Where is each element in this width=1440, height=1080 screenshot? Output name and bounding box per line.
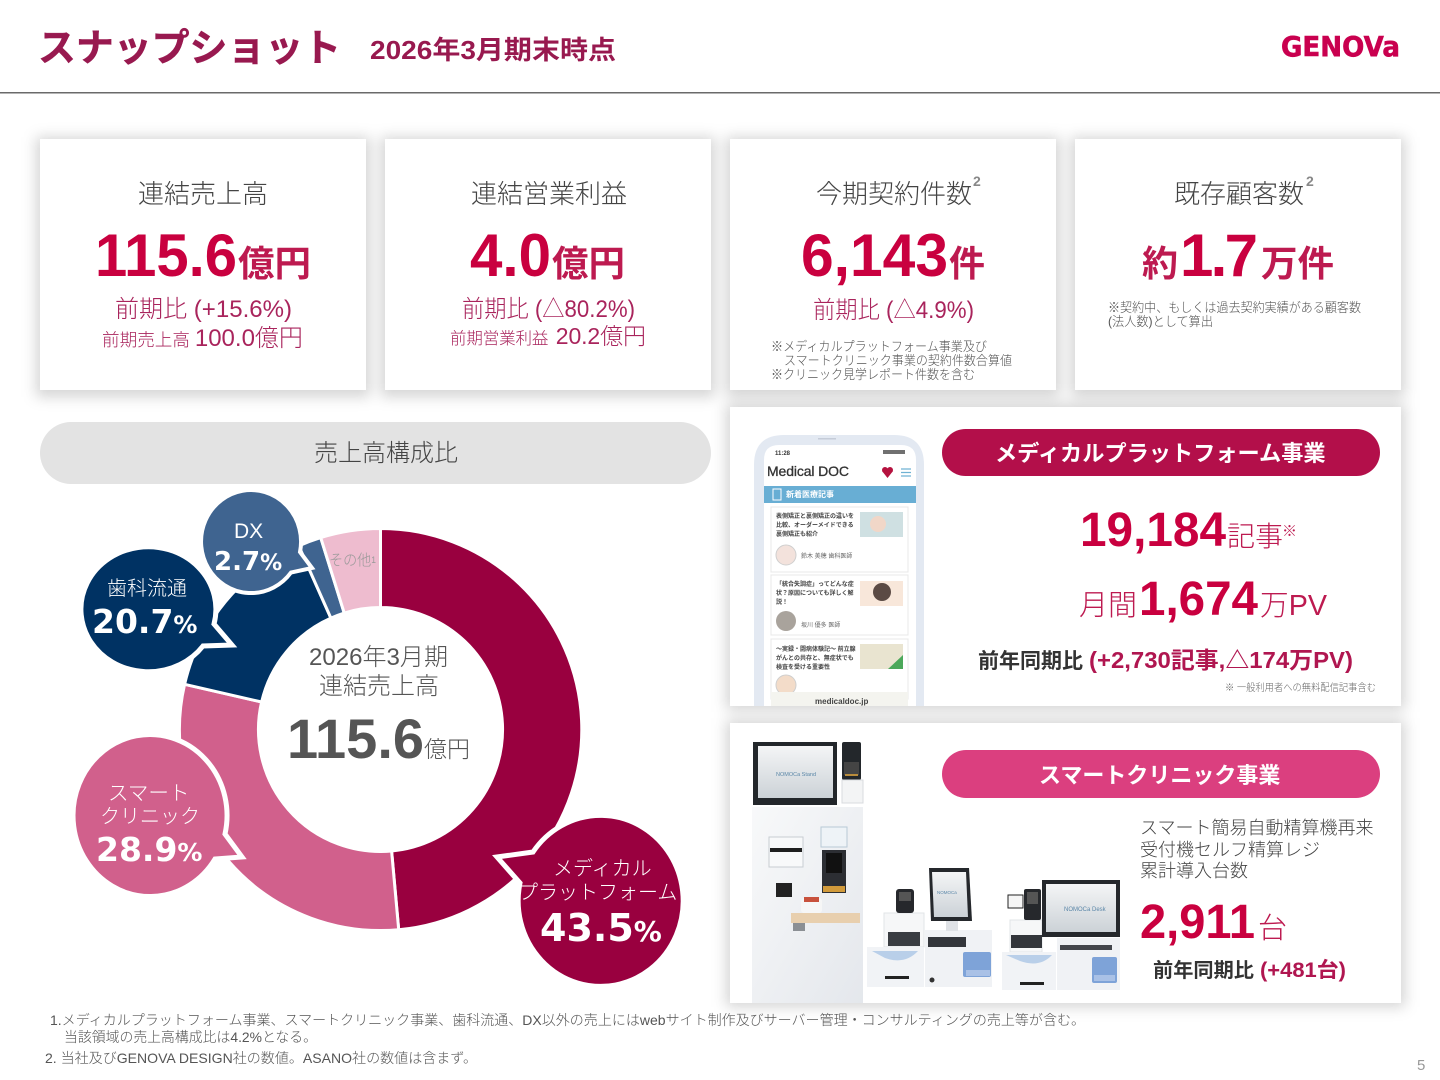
panel: card shadows <box>36 137 1405 1007</box>
heading: customers: 既存顧客数 <box>1174 179 1304 209</box>
title: スナップショット <box>38 28 341 70</box>
image: phone mockup: 11:28 <box>775 451 791 457</box>
callout: smart clinic: スマート <box>108 782 189 805</box>
figure: customers <box>1142 222 1334 289</box>
prior revenue: 前期売上高 100.0億円 <box>102 325 303 352</box>
figure: page views: 万PV <box>1260 590 1328 622</box>
heading: revenue composition: 売上高構成比 <box>314 440 458 467</box>
note: contracts: ※クリニック見学レポート件数を含む <box>771 367 975 382</box>
callout: DX: 2.7% <box>214 547 282 577</box>
prior profit: 前期営業利益 20.2億円 <box>450 323 646 349</box>
figure: customers: 万件 <box>1261 243 1334 284</box>
description: smart clinic: スマート簡易自動精算機再来 <box>1140 818 1373 838</box>
figure: profit <box>470 222 625 289</box>
figure: articles: 記事 <box>1227 521 1283 552</box>
note: customers: ※契約中、もしくは過去契約実績がある顧客数 <box>1108 300 1361 315</box>
figure: customers: 1.7 <box>1180 222 1258 289</box>
donut center label: 億円 <box>424 736 470 762</box>
footnotes: 2. 当社及びGENOVA DESIGN社の数値。ASANO社の数値は含まず。 <box>45 1050 477 1066</box>
panel: smart clinic business <box>730 723 1401 1003</box>
callout: medical platform: プラットフォーム <box>518 882 677 904</box>
figure: customers: 約 <box>1142 243 1178 284</box>
image: phone mockup: 「統合失調症」ってどんな症 <box>776 580 854 588</box>
figure: revenue <box>95 222 311 289</box>
figure: articles: ※ <box>1282 523 1297 540</box>
callout: dental: 20.7% <box>92 602 197 641</box>
donut center label: 2026年3月期 <box>309 644 448 671</box>
image: phone mockup: Medical DOC <box>767 463 849 479</box>
figure: page views <box>1079 573 1328 626</box>
figure: revenue: 億円 <box>238 243 311 284</box>
note: customers: (法人数)として算出 <box>1108 314 1213 329</box>
description: smart clinic <box>1140 818 1373 881</box>
panel: existing customers <box>1075 139 1401 390</box>
callout: dental: 歯科流通 <box>107 577 187 600</box>
note: contracts: スマートクリニック事業の契約件数合算値 <box>784 353 1012 368</box>
figure: installations: 2,911 <box>1140 896 1255 949</box>
callout: medical platform: メディカル <box>553 857 652 880</box>
note: contracts: ※メディカルプラットフォーム事業及び <box>771 339 987 354</box>
image: phone mockup: 検査を受ける重要性 <box>776 663 830 671</box>
pill heading: smart clinic <box>942 750 1380 798</box>
comparison: installations: (+481台) <box>1260 959 1346 982</box>
donut center label <box>287 644 470 770</box>
image: phone mockup: がんとの共存と、無症状でも <box>776 654 854 662</box>
heading: profit: 連結営業利益 <box>471 179 627 209</box>
footnote mark: 2 <box>1306 173 1314 189</box>
callout: medical platform <box>497 815 683 986</box>
comparison: articles and views <box>978 647 1353 673</box>
panel: consolidated revenue <box>40 139 366 390</box>
image: phone mockup: 説！ <box>776 598 788 606</box>
note: articles: ※ 一般利用者への無料配信記事含む <box>1225 682 1376 694</box>
callout: DX <box>201 490 312 593</box>
pill heading: medical platform: メディカルプラットフォーム事業 <box>995 440 1326 466</box>
image: kiosk and desktop terminals <box>752 742 1120 1003</box>
footnotes: 1.メディカルプラットフォーム事業、スマートクリニック事業、歯科流通、DX以外の売上にはwebサイト制作及びサーバー管理・コンサルティングの売上等が含む。 <box>50 1012 1085 1028</box>
figure: installations: 台 <box>1258 912 1287 945</box>
image: phone mockup: 新着医療記事 <box>786 489 834 499</box>
note: contracts <box>771 339 1012 382</box>
image: stand kiosk: NOMOCa Stand <box>776 772 816 778</box>
donut center label: 連結売上高 <box>319 673 439 700</box>
image: phone mockup: 坂川 優多 医師 <box>801 621 840 629</box>
panel: operating profit <box>385 139 711 390</box>
callout: smart clinic: クリニック <box>100 806 200 828</box>
subtitle: period: 2026年3月期末時点 <box>370 35 616 65</box>
comparison: contracts: 前期比 (△4.9%) <box>813 297 974 324</box>
panel: medical platform business <box>730 407 1401 706</box>
figure: revenue: 115.6 <box>95 222 237 289</box>
image: phone mockup: medicaldoc.jp <box>815 697 868 706</box>
figure: profit: 億円 <box>552 243 625 284</box>
footnotes: 当該領域の売上高構成比は4.2%となる。 <box>64 1029 317 1045</box>
heading: revenue: 連結売上高 <box>138 179 268 209</box>
pill heading: medical platform <box>942 429 1380 476</box>
label: others: 1 <box>371 555 376 565</box>
pill heading: smart clinic: スマートクリニック事業 <box>1039 763 1280 788</box>
image: self register terminal: NOMOCa <box>937 890 957 895</box>
comparison: installations <box>1153 959 1346 982</box>
figure: articles: 19,184 <box>1080 504 1226 557</box>
image: self register terminal <box>867 868 992 987</box>
figure: articles <box>1080 504 1297 557</box>
figure: contracts: 件 <box>949 243 985 284</box>
figure: page views: 1,674 <box>1139 573 1258 626</box>
donut center label: 115.6 <box>287 707 424 770</box>
comparison: revenue: 前期比 (+15.6%) <box>115 296 292 323</box>
logo: GENOVA: GENOVa <box>1281 30 1400 63</box>
figure: page views: 月間 <box>1079 590 1137 622</box>
callout: dental <box>81 547 232 672</box>
callout: smart clinic <box>73 735 242 897</box>
comparison: installations: 前年同期比 <box>1153 959 1254 982</box>
image: phone mockup: 状？原因についても詳しく解 <box>776 589 854 597</box>
label: others: その他 <box>329 552 374 569</box>
footnotes <box>45 1012 1085 1066</box>
comparison: profit: 前期比 (△80.2%) <box>462 296 635 323</box>
image: desk terminal <box>1002 880 1120 990</box>
image: desk terminal: NOMOCa Desk <box>1064 907 1107 913</box>
image: phone mockup: 比較、オーダーメイドできる <box>776 521 854 529</box>
image: phone mockup: 裏側矯正も紹介 <box>776 530 818 538</box>
image: stand kiosk <box>752 742 863 1003</box>
image: phone mockup: 表側矯正と裏側矯正の違いを <box>776 512 854 520</box>
image: phone mockup: 〜実録・闘病体験記〜 前立腺 <box>776 645 856 653</box>
heading: contracts: 今期契約件数 <box>816 179 972 209</box>
callout: smart clinic: 28.9% <box>96 830 202 869</box>
heading: revenue composition <box>40 422 711 484</box>
comparison: articles and views: 前年同期比 <box>978 650 1083 673</box>
description: smart clinic: 累計導入台数 <box>1140 861 1248 881</box>
note: customers <box>1108 300 1361 329</box>
image: phone mockup <box>754 435 924 706</box>
page number: 5 <box>1417 1057 1425 1074</box>
panel: contracts <box>730 139 1056 390</box>
callout: medical platform: 43.5% <box>540 906 662 950</box>
footnote mark: 2 <box>973 173 981 189</box>
comparison: articles and views: (+2,730記事,△174万PV) <box>1089 647 1353 673</box>
donut chart <box>179 528 582 931</box>
figure: contracts: 6,143 <box>801 222 948 289</box>
figure: profit: 4.0 <box>470 222 551 289</box>
image: phone mockup: 鈴木 美穂 歯科医師 <box>801 552 852 560</box>
callout: DX: DX <box>234 520 263 543</box>
description: smart clinic: 受付機セルフ精算レジ <box>1140 840 1320 860</box>
